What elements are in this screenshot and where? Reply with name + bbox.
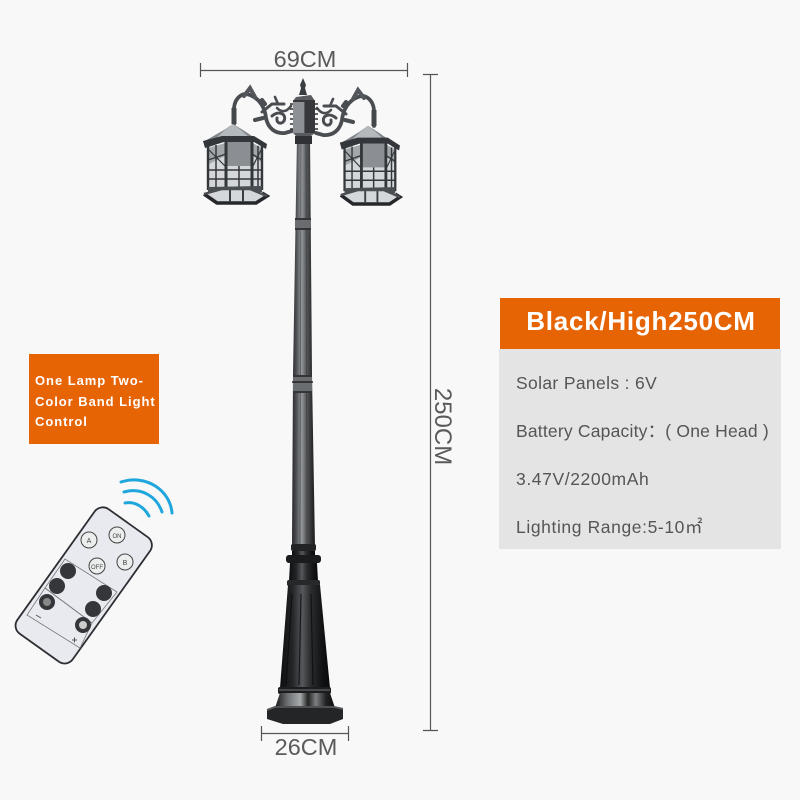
- panel: specifications: Solar Panels : 6V: [516, 373, 657, 393]
- panel: specifications: 3.47V/2200mAh: [516, 469, 649, 489]
- pole collars: [292, 218, 313, 393]
- panel: product header: [500, 298, 780, 349]
- callout: one lamp two-color band light control: [29, 354, 159, 444]
- dark buttons: [39, 563, 112, 633]
- panel: specifications: Battery Capacity：( One Head ): [516, 421, 769, 441]
- callout: one lamp two-color band light control: Color Band Light: [35, 394, 156, 409]
- right lantern: [340, 126, 400, 204]
- dimension: height 250CM: 250CM: [429, 388, 456, 465]
- lamp post: [203, 78, 400, 724]
- dimension: width 69CM: [200, 46, 408, 77]
- button groups outline: [27, 559, 117, 648]
- left lantern: [203, 124, 267, 203]
- cast iron base: [267, 544, 343, 724]
- outline buttons: B: [123, 560, 128, 567]
- outline buttons: A: [87, 538, 92, 545]
- top housing and finial: [290, 78, 318, 144]
- dimension: base 26CM: 26CM: [275, 734, 337, 760]
- panel: specifications: [499, 349, 781, 549]
- dimension: height 250CM: [423, 74, 456, 731]
- remote control: [12, 503, 156, 667]
- panel: product header: Black/High250CM: [526, 306, 756, 336]
- dimension: width 69CM: 69CM: [274, 46, 336, 72]
- arms: [232, 88, 376, 135]
- dimension: base 26CM: [262, 726, 348, 760]
- outline buttons: ON: [112, 534, 122, 540]
- outline buttons: OFF: [91, 565, 103, 571]
- wireless signal icon: [121, 480, 172, 516]
- callout: one lamp two-color band light control: One Lamp Two-: [35, 373, 144, 388]
- panel: specifications: Lighting Range:5-10㎡: [516, 517, 703, 537]
- outline buttons: [81, 527, 133, 574]
- callout: one lamp two-color band light control: Control: [35, 414, 88, 429]
- pole shaft: [292, 135, 315, 547]
